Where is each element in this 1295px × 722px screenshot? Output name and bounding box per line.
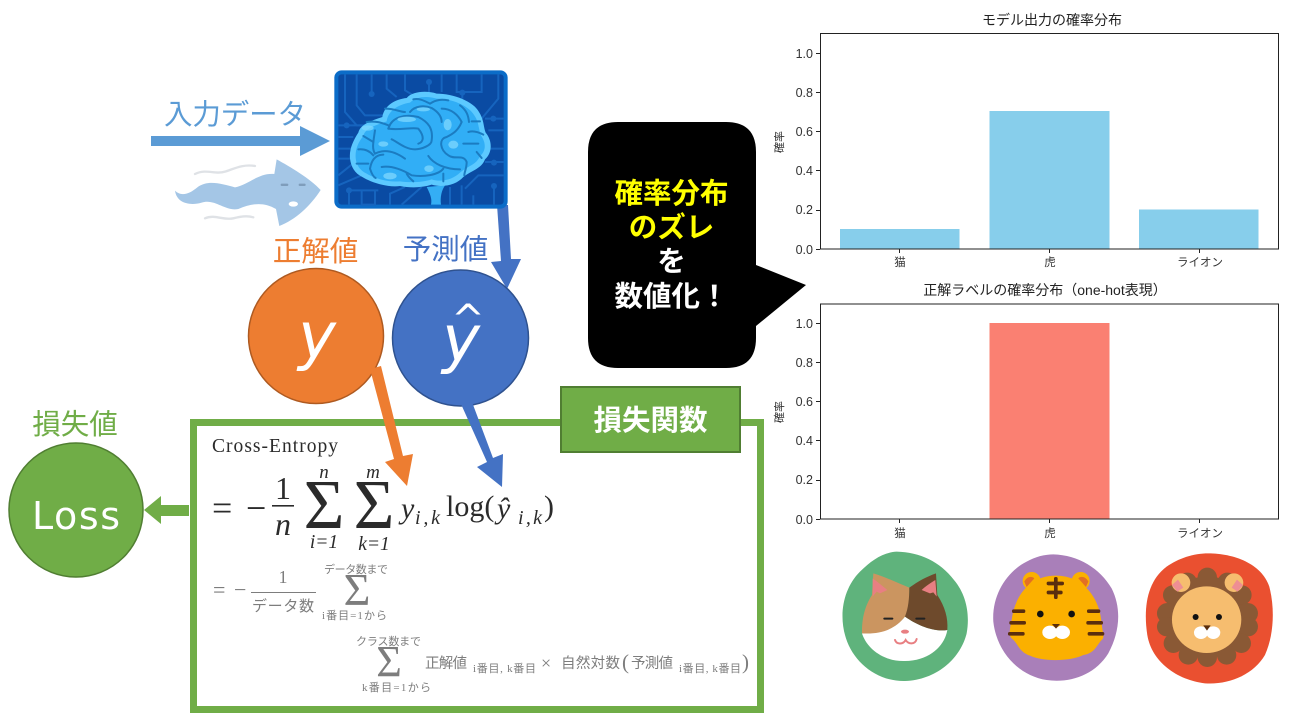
heading: loss function: [561, 387, 740, 452]
chart: model output distribution: 猫: [894, 256, 906, 269]
formula: explanation in Japanese: クラス数まで: [356, 635, 421, 648]
formula: explanation in Japanese: −: [234, 577, 246, 602]
icon: tiger: [993, 554, 1118, 681]
callout: quantify the gap: 数値化！: [614, 281, 729, 313]
chart: model output distribution: モデル出力の確率分布: [982, 12, 1122, 28]
formula: explanation in Japanese: i番目, k番目: [679, 662, 741, 675]
callout: quantify the gap: を: [657, 246, 686, 278]
chart: ground truth one-hot distribution: [773, 282, 1278, 540]
formula: explanation in Japanese: ): [742, 650, 749, 674]
circle: ground truth y: [248, 268, 384, 404]
formula: explanation in Japanese: k番目=1から: [362, 681, 431, 694]
formula: cross-entropy: n: [319, 462, 329, 483]
formula: cross-entropy: −: [246, 488, 266, 528]
formula: cross-entropy: [212, 436, 554, 555]
formula: explanation in Japanese: (: [622, 650, 629, 674]
circle: predicted y-hat: [392, 270, 528, 406]
chart: model output distribution: 1.0: [796, 47, 813, 61]
formula: cross-entropy: 1: [275, 470, 291, 506]
arrow: y to formula: [370, 366, 413, 486]
formula: cross-entropy: Σ: [304, 467, 344, 544]
formula: cross-entropy: y: [398, 492, 415, 525]
chart: ground truth one-hot distribution: 0.6: [796, 395, 813, 409]
icon: lion: [1146, 553, 1273, 683]
chart: model output distribution: 0.6: [796, 125, 813, 139]
heading: loss function: 損失関数: [593, 405, 708, 437]
chart: ground truth one-hot distribution: 1.0: [796, 317, 813, 331]
chart: model output distribution: ライオン: [1177, 256, 1223, 269]
formula: explanation in Japanese: データ数: [252, 597, 314, 615]
formula: explanation in Japanese: 自然対数: [561, 655, 620, 672]
chart: ground truth one-hot distribution: 0.0: [796, 513, 813, 527]
arrow: brain to prediction: [491, 205, 521, 289]
icon: brain on circuit board: [334, 70, 508, 209]
circle: loss: Loss: [32, 494, 120, 538]
label: input data: 入力データ: [164, 99, 306, 131]
formula: cross-entropy: Σ: [354, 467, 394, 544]
formula: explanation in Japanese: 1: [278, 567, 288, 587]
chart: ground truth one-hot distribution: 確率: [773, 401, 786, 423]
formula: explanation in Japanese: [213, 562, 749, 694]
chart: ground truth one-hot distribution: 虎: [1044, 527, 1056, 540]
chart: ground truth one-hot distribution: 0.8: [796, 356, 813, 370]
label: prediction: 予測値: [403, 234, 488, 266]
chart: model output distribution: [773, 12, 1278, 269]
chart: ground truth one-hot distribution: ライオン: [1177, 527, 1223, 540]
circle: predicted y-hat: y: [440, 303, 481, 377]
chart: ground truth one-hot distribution: 猫: [894, 527, 906, 540]
icon: cat: [842, 552, 968, 681]
chart: model output distribution: 虎: [1044, 256, 1056, 269]
formula: cross-entropy: n: [275, 506, 291, 542]
label: ground truth: 正解値: [273, 236, 358, 268]
chart: model output distribution: 0.0: [796, 243, 813, 257]
formula: cross-entropy: log(: [446, 490, 494, 523]
formula: explanation in Japanese: Σ: [344, 564, 370, 615]
circle: ground truth y: y: [296, 300, 337, 374]
chart: ground truth one-hot distribution: 0.4: [796, 434, 813, 448]
formula: explanation in Japanese: 正解値: [425, 655, 467, 672]
formula: cross-entropy: =: [212, 488, 232, 528]
formula: cross-entropy: i,k: [415, 507, 441, 529]
arrow: y-hat to formula: [461, 402, 503, 487]
chart: model output distribution: 0.2: [796, 203, 813, 217]
formula: explanation in Japanese: =: [213, 577, 225, 602]
callout: quantify the gap: [588, 122, 806, 368]
formula: cross-entropy: ): [544, 490, 554, 523]
formula: explanation in Japanese: 予測値: [631, 655, 673, 672]
chart: model output distribution: 0.8: [796, 86, 813, 100]
formula: cross-entropy: i=1: [310, 532, 338, 553]
label: loss value: 損失値: [32, 409, 118, 441]
formula: explanation in Japanese: データ数まで: [324, 562, 388, 576]
formula: explanation in Japanese: ×: [541, 653, 551, 673]
chart: model output distribution: 0.4: [796, 164, 813, 178]
formula: cross-entropy: Cross-Entropy: [212, 436, 338, 457]
chart: model output distribution: 確率: [773, 131, 786, 153]
loss function frame: [194, 422, 760, 710]
formula: explanation in Japanese: i番目=1から: [322, 609, 387, 622]
chart: ground truth one-hot distribution: 正解ラベルの確率分布（one-hot表現）: [923, 282, 1167, 298]
chart: ground truth one-hot distribution: 0.2: [796, 473, 813, 487]
circle: predicted y-hat: ^: [451, 297, 485, 343]
circle: loss: [9, 443, 143, 577]
callout: quantify the gap: のズレ: [629, 211, 714, 244]
arrow: input data into brain: [151, 126, 330, 156]
callout: quantify the gap: 確率分布: [614, 178, 729, 210]
formula: cross-entropy: m: [366, 462, 380, 483]
formula: cross-entropy: i,k: [518, 507, 543, 529]
arrow: frame to loss: [144, 496, 189, 524]
icon: fish: [175, 159, 321, 226]
formula: explanation in Japanese: i番目, k番目: [473, 662, 536, 675]
formula: cross-entropy: ŷ: [494, 492, 511, 525]
formula: cross-entropy: k=1: [358, 534, 390, 555]
formula: explanation in Japanese: Σ: [376, 637, 402, 686]
